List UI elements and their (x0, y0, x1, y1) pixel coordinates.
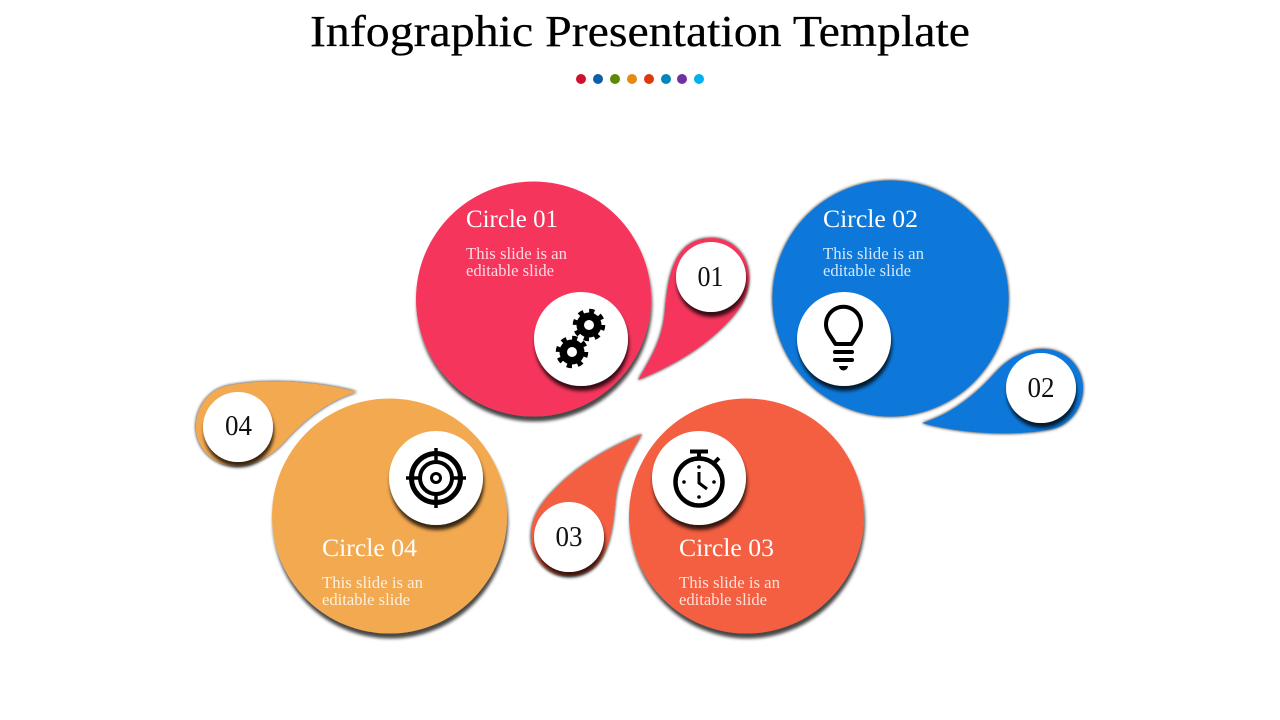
heading: circle 01: Circle 01 (466, 206, 558, 233)
panel: circle 03 (629, 398, 864, 634)
number 03: 03 (556, 522, 582, 553)
callout: teardrop 04 (196, 382, 357, 466)
number 02: 02 (1028, 373, 1054, 404)
text: circle 03 description (679, 573, 780, 609)
panel: circle 02 (772, 180, 1008, 416)
callout: teardrop 02 (922, 349, 1083, 433)
heading: circle 04: Circle 04 (322, 535, 418, 562)
text: circle 01 description: editable slide (466, 261, 554, 280)
text: circle 02 description (823, 244, 924, 280)
icon: stopwatch (652, 431, 746, 525)
number 04: 04 (225, 411, 252, 442)
text: circle 01 description (466, 244, 567, 280)
heading: circle 02: Circle 02 (823, 206, 918, 233)
text: circle 02 description: editable slide (823, 261, 911, 280)
panel: circle 04 (272, 398, 507, 634)
callout: teardrop 03 (531, 434, 642, 576)
number 01: 01 (698, 262, 724, 293)
text: circle 03 description: editable slide (679, 590, 767, 609)
text: circle 03 description: This slide is an (679, 573, 780, 592)
text: circle 04 description: This slide is an (322, 573, 423, 592)
text: circle 01 description: This slide is an (466, 244, 567, 263)
text: circle 02 description: This slide is an (823, 244, 924, 263)
icon: target (389, 431, 483, 525)
icon: light bulb (797, 292, 891, 386)
text: circle 04 description (322, 573, 423, 609)
icon: gears (534, 292, 628, 386)
title: Infographic Presentation Template (310, 7, 970, 56)
heading: circle 03: Circle 03 (679, 535, 774, 562)
decorative colored dots row (576, 74, 704, 84)
panel: circle 01 (416, 182, 651, 416)
callout: teardrop 01 (638, 238, 749, 380)
text: circle 04 description: editable slide (322, 590, 410, 609)
